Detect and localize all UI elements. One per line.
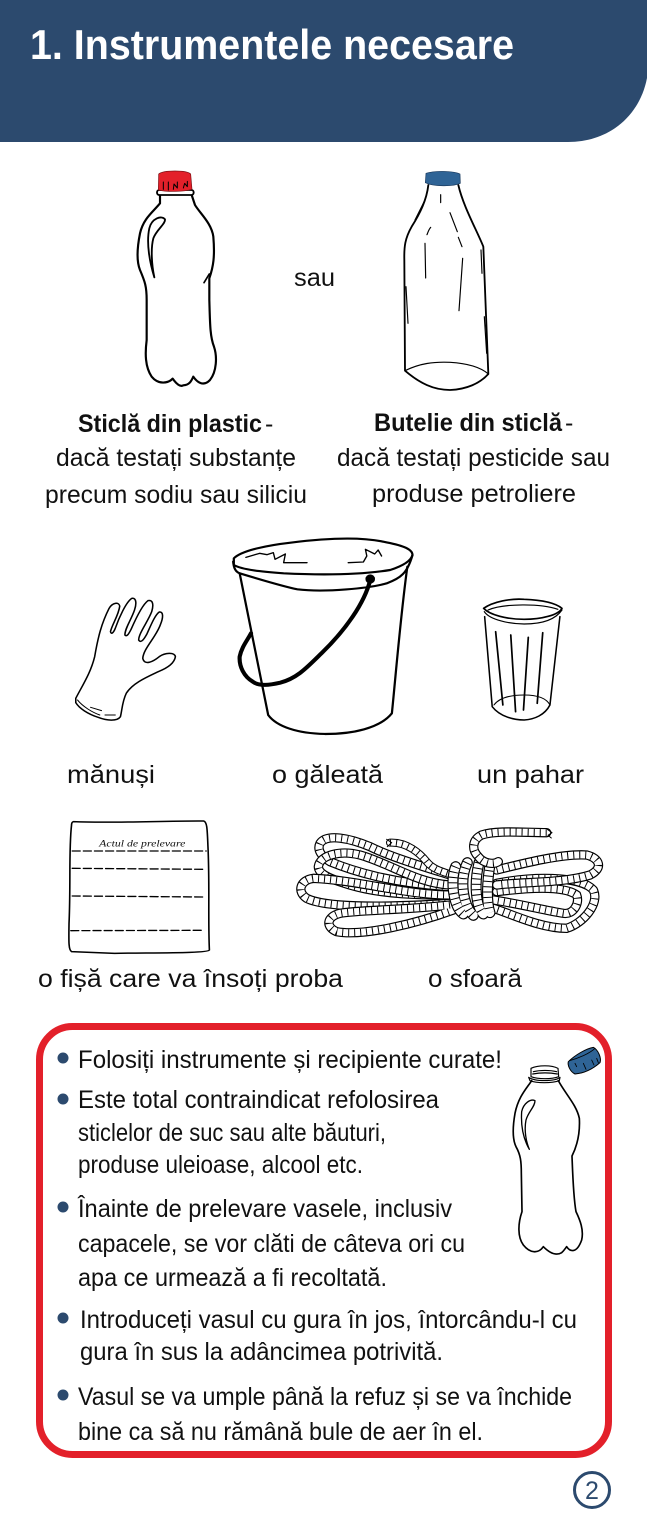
bullet 5: bine ca să nu rămână bule de aer în el. — [78, 1418, 483, 1446]
captions: glove, bucket, glass — [67, 761, 584, 789]
header banner — [0, 0, 647, 142]
bullet 5: Vasul se va umple până la refuz și se va închide — [78, 1383, 572, 1411]
bullet 5 — [58, 1383, 572, 1446]
bullet 4: gura în sus la adâncimea potrivită. — [80, 1338, 443, 1366]
text: glass bottle description: dacă testați pesticide sau — [337, 444, 610, 472]
text: glass bottle description: produse petroliere — [372, 480, 576, 508]
bullet 3: capacele, se vor clăti de câteva ori cu — [78, 1230, 465, 1258]
bullet 4: Introduceți vasul cu gura în jos, întorcându-l cu — [80, 1306, 577, 1334]
text: plastic bottle description: dacă testați substanțe — [56, 444, 296, 472]
captions: glove, bucket, glass: mănuși — [67, 761, 155, 789]
bullet 2: Este total contraindicat refolosirea — [78, 1086, 439, 1114]
captions: form and rope: o fișă care va însoți proba — [38, 965, 343, 993]
bullet 3: Înainte de prelevare vasele, inclusiv — [77, 1194, 452, 1223]
text: plastic bottle description — [45, 410, 307, 509]
bullet list — [58, 1046, 577, 1446]
page number — [574, 1472, 610, 1508]
captions: form and rope — [38, 965, 522, 993]
text: plastic bottle description: precum sodiu sau siliciu — [45, 481, 307, 509]
bullet 2: sticlelor de suc sau alte băuturi, — [78, 1119, 386, 1147]
page number: 2 — [585, 1477, 599, 1505]
text: plastic bottle description: Sticlă din plastic — [78, 410, 262, 438]
captions: form and rope: o sfoară — [428, 965, 522, 993]
icon: sampling form — [69, 821, 209, 953]
bullet 4 — [58, 1306, 577, 1366]
title: 1. Instrumentele necesare — [30, 21, 514, 68]
icon: glove — [76, 598, 175, 720]
icon: open bottle with blue cap — [513, 1047, 600, 1254]
captions: glove, bucket, glass: un pahar — [477, 761, 584, 789]
text: glass bottle description — [337, 409, 610, 508]
bullet 2: produse uleioase, alcool etc. — [78, 1151, 363, 1179]
icon: plastic bottle with red cap — [137, 171, 216, 386]
bullet 1: Folosiți instrumente și recipiente curate! — [78, 1046, 502, 1074]
bullet 2 — [58, 1086, 439, 1179]
text: glass bottle description: Butelie din sticlă — [374, 409, 563, 437]
text: sau: sau — [294, 264, 335, 292]
icon: glass bottle with blue cap — [404, 171, 488, 390]
text: plastic bottle description: - — [265, 410, 273, 438]
icon: bucket — [233, 539, 412, 734]
bullet 3: apa ce urmează a fi recoltată. — [78, 1264, 387, 1292]
bullet 3 — [58, 1194, 465, 1292]
captions: glove, bucket, glass: o găleată — [272, 761, 383, 789]
icon: drinking glass — [484, 599, 562, 720]
panel: safety recommendations — [40, 1026, 608, 1454]
icon: coiled rope — [301, 829, 598, 933]
form heading: Actul de prelevare — [98, 840, 185, 850]
text: glass bottle description: - — [565, 409, 573, 437]
